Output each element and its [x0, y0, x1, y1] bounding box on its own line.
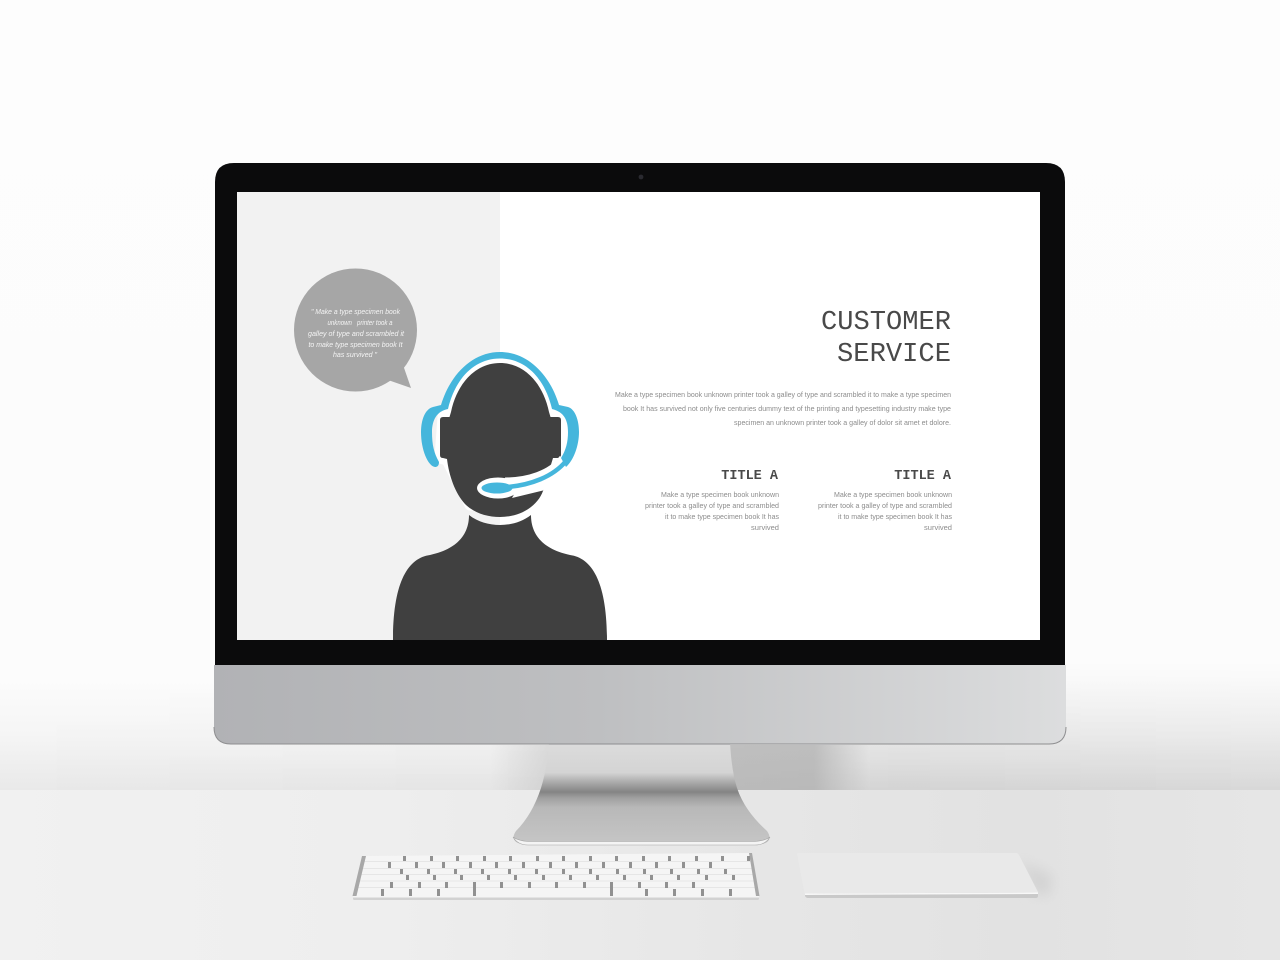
bubble quote text: " Make a type specimen book: [311, 307, 401, 316]
column heading: TITLE A: [894, 469, 952, 484]
trackpad shadow: [1018, 862, 1052, 895]
column text: it to make type specimen book It has: [838, 512, 952, 521]
microphone boom: [508, 461, 566, 487]
column text: printer took a galley of type and scrambled: [645, 501, 779, 510]
heading: [821, 308, 951, 370]
icon: customer service agent: [393, 352, 607, 640]
left grey panel: [237, 192, 500, 640]
intro paragraph: specimen an unknown printer took a galley of dolor sit amet et dolore.: [734, 418, 951, 427]
intro paragraph: Make a type specimen book unknown printer took a galley of type and scrambled it to make a type specimen: [615, 390, 951, 399]
column text: survived: [751, 523, 779, 532]
bubble quote text: has survived ": [333, 350, 377, 359]
speech bubble: [294, 268, 417, 392]
heading: SERVICE: [837, 340, 951, 370]
key row lines: [356, 862, 757, 888]
intro paragraph: book It has survived not only five centuries dummy text of the printing and typesetting industry make type: [623, 404, 951, 413]
screen: [237, 192, 1040, 640]
monitor: [214, 163, 1066, 744]
monitor stand: [513, 742, 770, 845]
column heading: TITLE A: [721, 469, 779, 484]
column text: [818, 490, 952, 532]
bubble quote text: galley of type and scrambled it: [308, 329, 405, 338]
headset band and earpieces: [421, 352, 579, 467]
microphone: [482, 482, 512, 494]
column text: survived: [924, 523, 952, 532]
column: title A right: [818, 469, 952, 532]
trackpad: [797, 853, 1052, 898]
agent body: [393, 515, 607, 640]
agent head halo: [440, 363, 561, 505]
key gaps: [381, 856, 750, 896]
monitor chin: [214, 665, 1066, 744]
heading: CUSTOMER: [821, 308, 951, 338]
white gap around microphone boom: [505, 460, 565, 484]
column text: printer took a galley of type and scrambled: [818, 501, 952, 510]
agent head: [440, 363, 561, 517]
column text: Make a type specimen book unknown: [834, 490, 952, 499]
keyboard: [352, 853, 760, 900]
column text: Make a type specimen book unknown: [661, 490, 779, 499]
monitor shadow on wall: [490, 745, 870, 790]
column text: [645, 490, 779, 532]
monitor bezel: [215, 163, 1065, 665]
bubble quote text: to make type specimen book It: [308, 340, 403, 349]
bubble quote text: unknown printer took a: [328, 318, 392, 327]
intro paragraph: [615, 390, 951, 427]
table surface: [0, 790, 1280, 960]
webcam: [639, 175, 643, 179]
bubble quote text: [308, 307, 405, 359]
column text: it to make type specimen book It has: [665, 512, 779, 521]
column: title A left: [645, 469, 779, 532]
